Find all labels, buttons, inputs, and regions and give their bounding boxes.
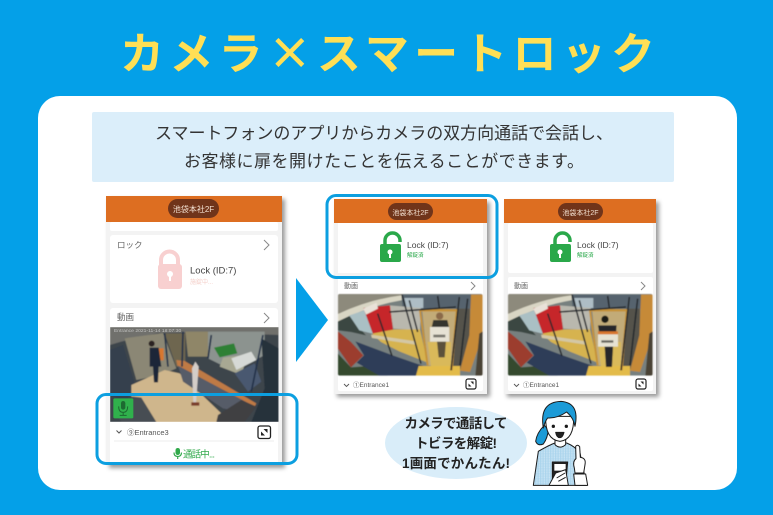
camera photo: customer carrying parcel inside xyxy=(508,294,653,376)
hair xyxy=(543,401,576,428)
video card xyxy=(508,277,653,391)
fullscreen icon xyxy=(258,426,270,438)
orange header xyxy=(334,199,487,223)
phone hand xyxy=(549,470,568,485)
description text block: お客様に扉を開けたことを伝えることができます。 xyxy=(184,152,584,171)
face xyxy=(546,416,574,441)
orange header: 池袋本社2F xyxy=(173,204,214,214)
speech bubble: トビラを解錠! xyxy=(415,435,497,451)
call status: 通話中... xyxy=(183,448,215,460)
phone screen: unlocked, customer at door xyxy=(334,199,487,394)
video card: 動画 xyxy=(514,281,528,290)
speech bubble xyxy=(385,407,527,479)
lock card: Lock (ID:7) xyxy=(577,240,619,250)
phone body xyxy=(106,196,282,465)
highlight frame: call controls xyxy=(97,394,297,464)
lock card xyxy=(110,235,278,303)
video card xyxy=(110,308,279,465)
fullscreen icon xyxy=(636,379,646,389)
neck xyxy=(555,438,566,447)
video card: 動画 xyxy=(117,312,134,322)
lock card: ロック xyxy=(117,240,143,250)
raised hand xyxy=(574,445,585,473)
highlight frame: unlocked status xyxy=(327,196,497,278)
lock card: Lock (ID:7) xyxy=(190,266,236,276)
video card: 動画 xyxy=(344,281,358,290)
orange header: 池袋本社2F xyxy=(562,208,599,217)
lock card: 施錠中... xyxy=(190,278,213,286)
video card: ①Entrance1 xyxy=(523,381,560,389)
camera timestamp: Entrance 2021-11-14 18:07:30 xyxy=(114,328,181,334)
camera name row xyxy=(116,430,122,433)
lock card: 解錠済 xyxy=(577,251,594,259)
video card: ①Entrance1 xyxy=(353,381,390,389)
phone screen: before, unlocking with active call xyxy=(106,196,282,465)
orange header: 池袋本社2F xyxy=(392,208,429,217)
microphone button xyxy=(113,398,133,418)
camera photo: customer behind door with parcel xyxy=(338,294,483,376)
description text block: スマートフォンのアプリからカメラの双方向通話で会話し、 xyxy=(155,124,613,143)
title: カメラ×スマートロック xyxy=(120,18,655,82)
lock card: 解錠済 xyxy=(407,251,424,259)
video card: ⑨Entrance3 xyxy=(127,428,169,437)
illustration: woman with smartphone xyxy=(533,401,588,485)
call status xyxy=(174,448,215,460)
top card remnant xyxy=(110,222,278,231)
lock card xyxy=(508,223,653,273)
torso xyxy=(533,443,587,485)
sleeve xyxy=(574,474,588,485)
lock card: Lock (ID:7) xyxy=(407,240,449,250)
phone screen: customer entering xyxy=(504,199,656,394)
phone xyxy=(552,462,568,485)
description text block xyxy=(92,112,674,182)
white content panel xyxy=(38,96,737,490)
unlocked icon xyxy=(380,233,401,262)
eyes xyxy=(552,425,554,427)
speech bubble: 1画面でかんたん! xyxy=(402,456,510,471)
mouth xyxy=(556,432,564,438)
camera photo: office interior xyxy=(110,327,279,422)
unlocked icon xyxy=(550,233,571,262)
video card xyxy=(338,277,483,391)
pale lock icon xyxy=(158,252,182,289)
lock card xyxy=(338,223,483,273)
fullscreen icon xyxy=(466,379,476,389)
orange header xyxy=(106,196,282,222)
speech bubble: カメラで通話して xyxy=(404,416,508,431)
ponytail xyxy=(536,425,548,445)
arrow xyxy=(296,278,328,362)
orange header xyxy=(504,199,656,223)
